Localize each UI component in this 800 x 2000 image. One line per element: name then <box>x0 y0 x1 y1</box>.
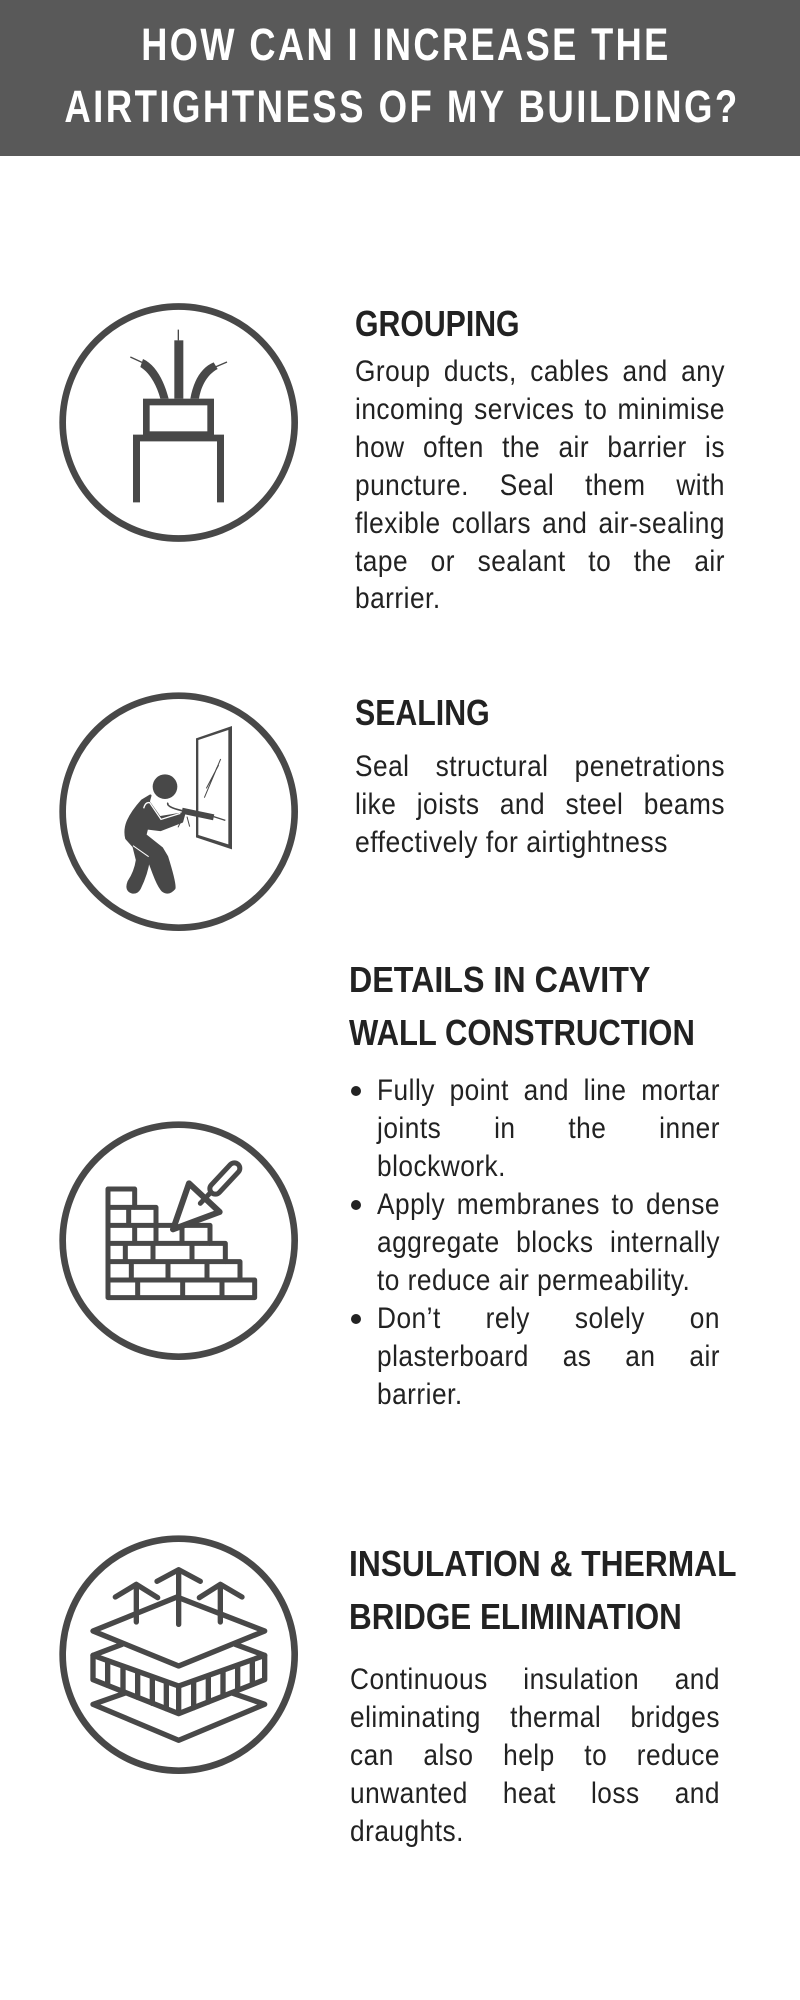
bullet: mortar joints: Fully point and line mortar <box>376 1074 719 1107</box>
text: grouping description: incoming services to minimise <box>355 393 725 426</box>
bullet: plasterboard: barrier. <box>376 1378 462 1411</box>
bullet: mortar joints: joints in the inner <box>376 1112 719 1145</box>
heading: details in cavity wall construction: WALL CONSTRUCTION <box>349 1012 695 1053</box>
text: grouping description: flexible collars and air-sealing <box>355 507 725 540</box>
panel: sealing <box>59 692 725 931</box>
heading: grouping: GROUPING <box>355 303 520 344</box>
text: grouping description: puncture. Seal them with <box>355 469 725 502</box>
bullet: membranes: to reduce air permeability. <box>376 1264 690 1297</box>
bullet: mortar joints: blockwork. <box>376 1150 505 1183</box>
text: grouping description: tape or sealant to the air <box>355 544 725 578</box>
bullet: membranes: Apply membranes to dense <box>376 1188 719 1221</box>
text: sealing description <box>355 750 725 859</box>
panel: grouping <box>59 303 725 615</box>
text: insulation description: can also help to reduce <box>350 1739 719 1772</box>
text: grouping description: how often the air barrier is <box>355 431 725 464</box>
bullet: plasterboard <box>351 1302 720 1411</box>
heading: insulation and thermal bridge elimination <box>349 1543 737 1637</box>
icon: person sealing with caulk gun <box>59 692 298 931</box>
text: sealing description: effectively for airtightness <box>355 826 668 859</box>
bullet list <box>351 1074 720 1411</box>
icon: insulation layers with rising arrows <box>59 1535 298 1774</box>
text: grouping description: Group ducts, cables and any <box>355 355 725 388</box>
panel: insulation and thermal bridge elimination <box>59 1535 737 1848</box>
bullet: plasterboard: Don’t rely solely on <box>376 1302 719 1335</box>
text: grouping description <box>355 355 725 615</box>
icon: brick wall and trowel <box>59 1121 298 1360</box>
bullet: mortar joints <box>351 1074 720 1183</box>
text: insulation description <box>350 1663 719 1848</box>
text: insulation description: unwanted heat loss and <box>350 1777 719 1810</box>
title line 2: AIRTIGHTNESS OF MY BUILDING? <box>64 81 740 132</box>
heading: details in cavity wall construction: DETAILS IN CAVITY <box>349 959 650 1000</box>
text: sealing description: Seal structural penetrations <box>355 750 725 783</box>
text: insulation description: Continuous insulation and <box>350 1663 719 1696</box>
bullet: membranes <box>351 1188 720 1297</box>
panel: details in cavity wall construction <box>59 959 720 1411</box>
text: sealing description: like joists and steel beams <box>355 788 725 821</box>
text: insulation description: eliminating thermal bridges <box>350 1701 719 1734</box>
text: insulation description: draughts. <box>350 1815 463 1848</box>
text: grouping description: barrier. <box>355 582 441 615</box>
heading: details in cavity wall construction <box>349 959 695 1053</box>
bullet: membranes: aggregate blocks internally <box>376 1226 719 1259</box>
title line 1: HOW CAN I INCREASE THE <box>141 19 671 70</box>
title banner <box>0 0 800 156</box>
heading: insulation and thermal bridge elimination: BRIDGE ELIMINATION <box>349 1596 682 1637</box>
heading: sealing: SEALING <box>355 692 490 733</box>
bullet: plasterboard: plasterboard as an air <box>376 1340 719 1373</box>
icon: cables through collar <box>59 303 298 542</box>
heading: insulation and thermal bridge elimination: INSULATION & THERMAL <box>349 1543 737 1584</box>
